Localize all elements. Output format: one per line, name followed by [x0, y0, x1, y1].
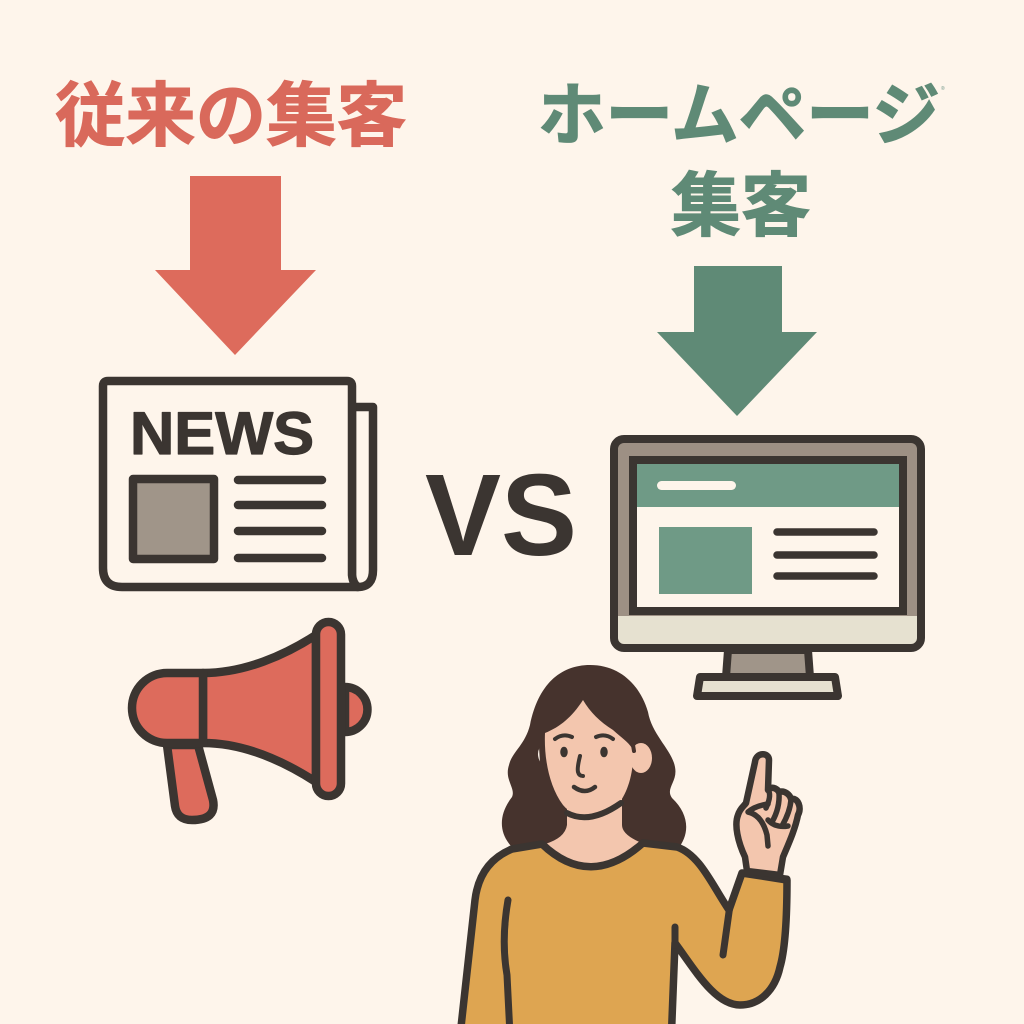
sweater: [459, 843, 787, 1024]
hand fingers detail: [748, 790, 791, 846]
heading: website marketing line 1: ホームページ: [538, 78, 940, 154]
vs label: VS: [425, 450, 577, 580]
icon: megaphone: [132, 622, 367, 820]
website header: [637, 464, 899, 507]
heading: website marketing line 2: 集客: [671, 167, 811, 245]
newspaper photo: [133, 479, 214, 559]
website image: [659, 527, 752, 594]
hand with raised finger: [736, 754, 800, 875]
sweater fold lines: [504, 873, 787, 1024]
arrow: red down: [155, 176, 316, 355]
heading: traditional marketing: 従来の集客: [55, 77, 407, 155]
left ear sliver: [537, 747, 540, 763]
hair: [502, 665, 686, 850]
facial features: [555, 735, 634, 817]
icon: desktop monitor: [614, 439, 921, 696]
ear: [630, 743, 652, 773]
monitor body: [614, 439, 921, 648]
monitor screen: [633, 460, 903, 611]
website header bar: [657, 481, 736, 490]
newspaper title: NEWS: [130, 400, 314, 467]
website text lines: [777, 532, 874, 576]
face: [545, 700, 633, 817]
arrow: green down: [657, 266, 817, 416]
illustration: woman pointing up: [459, 665, 800, 1024]
monitor stand: [726, 650, 810, 677]
monitor base: [697, 677, 838, 696]
neck: [545, 795, 642, 864]
newspaper text lines: [238, 480, 322, 558]
registered mark: ®: [941, 85, 945, 92]
icon: newspaper: [103, 381, 373, 587]
